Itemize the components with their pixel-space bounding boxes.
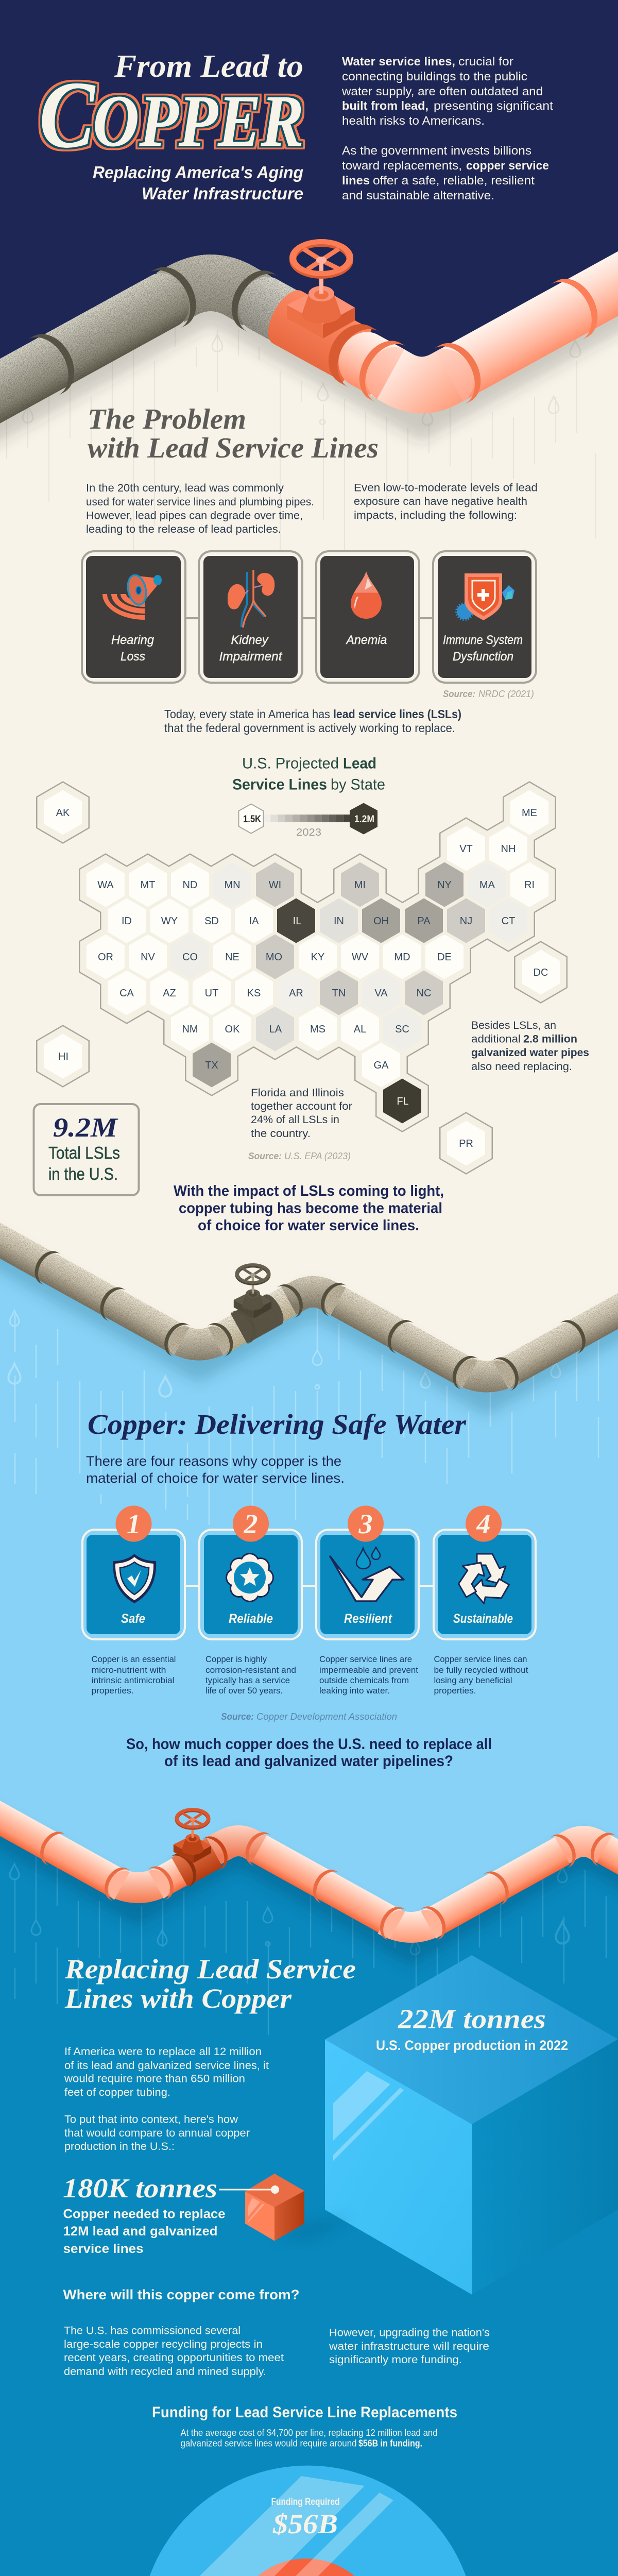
text: funding need: significantly more funding. [329,2353,462,2366]
value: funding required [271,2497,340,2539]
text: replacement context: of its lead and galvanized service lines, it [64,2059,269,2072]
text: galvanized pipes note: Besides LSLs, an [471,1019,556,1031]
state: WV: WV [352,952,369,963]
title [39,49,304,203]
text: replacement context: To put that into context, here's how [64,2113,238,2126]
value label: U.S. Copper production in 2022 [376,2038,568,2053]
state: MA: MA [479,879,495,891]
text: every state statement: lead service lines (LSLs) [333,707,461,721]
text: Florida and Illinois note [251,1087,352,1140]
label: Impairment [219,650,283,664]
callout: total LSLs: Total LSLs [48,1143,120,1162]
state: MD [383,935,421,979]
state: PA: PA [417,916,431,927]
state: MN [213,862,251,907]
state: OK [213,1007,251,1051]
text: benefit descriptions: impermeable and prevent [319,1665,418,1675]
state: AR [277,971,315,1015]
heading: hex map title [232,755,385,793]
card: sustainable [434,1505,536,1639]
card: reliable [199,1505,302,1639]
state: MT [129,862,167,907]
state: AK [44,790,82,835]
number badge: 1 [127,1509,141,1539]
text: copper transition statement: of choice for water service lines. [198,1217,419,1234]
text: every state statement: that the federal government is actively working to replace. [164,721,455,735]
text: benefit descriptions: life of over 50 years. [205,1686,283,1696]
intro text: copper service [466,159,549,172]
intro text: water supply, are often outdated and [341,84,543,98]
state: LA [256,1007,294,1051]
legend: lead service line scale: 1.2M [354,814,374,825]
text: benefit descriptions: outside chemicals from [319,1675,409,1685]
state: NH [489,826,527,871]
source: Copper Development Association: Source: [221,1711,254,1722]
state: KS [235,971,273,1015]
text: how much copper question: of its lead and galvanized water pipelines? [164,1753,453,1770]
text: four reasons intro [86,1453,345,1486]
text: replacement context: production in the U.S.: [64,2140,175,2153]
text: Florida and Illinois note: together account for [251,1100,352,1112]
intro text: presenting significant [434,99,554,112]
card: hearing loss [82,551,185,683]
state: TN: TN [332,988,346,999]
state: MS: MS [310,1024,325,1035]
state: NV: NV [141,952,156,963]
legend: lead service line scale: 1.5K [243,814,261,825]
text: replacement context: would require more than 650 million [64,2072,245,2084]
text: lead history [86,482,314,535]
label [443,633,523,664]
panel: copper benefit cards [82,1505,536,1639]
state: MN: MN [224,879,241,891]
text: copper transition statement: With the impact of LSLs coming to light, [174,1183,444,1199]
state: OR: OR [98,952,113,963]
state: UT [193,971,231,1015]
legend: lead service line scale: 2023 [296,827,321,838]
state: CA: CA [119,988,134,999]
text: funding subhead [180,2427,438,2448]
state: NM: NM [182,1024,198,1035]
text: benefit descriptions: Copper service lines can [434,1654,527,1664]
state: VA [362,971,400,1015]
text: benefit descriptions: intrinsic antimicrobial [92,1675,174,1685]
state: IA: IA [249,916,259,927]
callout: total LSLs [34,1104,139,1195]
state: NY: NY [437,879,452,891]
text: galvanized pipes note: 2.8 million [523,1032,577,1045]
state: GA: GA [374,1060,389,1071]
label: Kidney [231,633,269,647]
label: Hearing [111,633,154,647]
state: IN: IN [334,916,344,927]
source: NRDC: NRDC (2021) [478,689,534,699]
state: IL [277,899,315,943]
state: RI: RI [524,879,535,891]
state: IN [320,899,358,943]
text: benefit descriptions: typically has a service [205,1675,290,1685]
label: Resilient [344,1612,392,1626]
state: MT: MT [141,879,155,891]
state: WY [150,899,188,943]
value: funding required: Funding Required [271,2497,340,2507]
text: benefit descriptions: properties. [434,1686,476,1696]
heading: Replacing Lead Service Lines: Replacing Lead Service [64,1954,356,1985]
state: WA [87,862,125,907]
intro text: built from lead, [342,99,428,112]
callout: 180K tonnes: 12M lead and galvanized [63,2224,217,2239]
state: KS: KS [247,988,261,999]
state: AL: AL [354,1024,366,1035]
state: IA [235,899,273,943]
heading: hex map title: Lead [343,755,376,772]
state: OH [362,899,400,943]
state: AR: AR [289,988,303,999]
intro text: toward replacements, [342,159,462,172]
state: VT: VT [459,843,473,855]
callout: total LSLs: 9.2M [53,1113,118,1143]
state: NE [213,935,251,979]
state: TN [320,971,358,1015]
pipe: lead and copper header pipe [0,223,618,446]
state: UT: UT [205,988,218,999]
state: MO [256,935,294,979]
state: SC [383,1007,421,1051]
icon: kidneys [228,570,274,628]
value label [376,2004,568,2053]
chart: large cube for U.S. copper production [325,1955,618,2295]
icon: shield with check [113,1554,156,1603]
state: DE [425,935,464,979]
heading: Where will this copper come from: Where will this copper come from? [63,2287,300,2302]
title: COPPER [39,62,304,168]
number badge: 4 [476,1509,490,1539]
intro text: and sustainable alternative. [342,189,494,202]
icon: rosette with star [226,1553,274,1602]
title: COPPER: C [39,62,96,168]
heading: hex map title: by State [331,776,385,793]
intro text: As the government invests billions [342,144,531,157]
text: benefit descriptions: be fully recycled without [434,1665,528,1675]
intro text: health risks to Americans. [342,114,485,127]
state: TX: TX [205,1060,218,1071]
text: benefit descriptions: losing any beneficial [434,1675,512,1685]
callout: total LSLs: in the U.S. [48,1164,118,1183]
source: EPA: Source: [248,1151,282,1161]
state: NJ [447,899,485,943]
callout: 180K tonnes: Copper needed to replace [63,2207,226,2222]
text: benefit descriptions [92,1654,528,1696]
card: kidney impairment [199,551,302,683]
text: recycling projects: large-scale copper recycling projects in [64,2338,263,2350]
text: replacement context: that would compare to annual copper [64,2127,250,2139]
text: benefit descriptions: properties. [92,1686,134,1696]
valve: lead pipeline valve [234,1263,271,1318]
icon: blood drop [351,571,382,619]
text: lead history: However, lead pipes can degrade over time, [86,509,303,521]
state: HI: HI [58,1051,68,1062]
state: RI [510,862,548,907]
text: replacement context: If America were to replace all 12 million [64,2045,262,2058]
source: NRDC [443,689,534,699]
state: ID: ID [122,916,132,927]
state: SD: SD [204,916,219,927]
text: funding subhead: At the average cost of $4,700 per line, replacing 12 million lead and [180,2427,438,2438]
heading: The Problem: with Lead Service Lines [88,432,379,464]
valve: copper pipeline valve [174,1808,211,1863]
text: how much copper question [126,1736,492,1770]
title: COPPER: OPPER [93,80,304,162]
icon: check arrow with drops [330,1547,404,1601]
number badge [233,1505,269,1541]
heading: funding chart: Funding for Lead Service Line Replacements [152,2404,457,2421]
state: WI: WI [269,879,281,891]
text: recycling projects: recent years, creating opportunities to meet [64,2351,284,2364]
heading: Replacing Lead Service Lines: Lines with Copper [64,1983,292,2014]
text: benefit descriptions: corrosion-resistant and [205,1665,296,1675]
state: PA [405,899,443,943]
state: IL: IL [293,916,301,927]
state: AZ [150,971,188,1015]
state: MS [299,1007,337,1051]
card: safe [82,1505,185,1639]
state: WV [341,935,379,979]
subtitle: Water Infrastructure [142,184,303,203]
intro text: connecting buildings to the public [342,70,527,83]
text: replacement context [64,2045,269,2153]
text: every state statement [164,707,461,735]
text: recycling projects: The U.S. has commissioned several [64,2325,241,2337]
label: Reliable [229,1612,273,1626]
number badge [466,1505,502,1541]
source: Copper Development Association: Copper Development Association [256,1711,397,1722]
pipe shadow: lead [0,1225,618,1397]
state: MO: MO [266,952,282,963]
state: NY [425,862,464,907]
text: benefit descriptions: micro-nutrient with [92,1665,166,1675]
card: resilient [316,1505,419,1639]
state: AL [341,1007,379,1051]
source: EPA: U.S. EPA (2023) [284,1151,351,1161]
state: WI [256,862,294,907]
background: light blue section [0,1241,618,1958]
heading: The Problem [88,403,379,464]
state: KY [299,935,337,979]
label [111,633,154,664]
pipe: copper pipeline [0,1776,618,1941]
heading: hex map title: Service Lines [232,776,327,793]
text: galvanized pipes note: also need replacing. [471,1060,572,1073]
callout: 180K tonnes: service lines [63,2242,143,2256]
state: CT [489,899,527,943]
text: copper transition statement [174,1183,444,1234]
text: health impacts intro: Even low-to-moderate levels of lead [354,481,538,494]
text: galvanized pipes note: additional [471,1032,521,1045]
background: cream section [0,275,618,1391]
intro text [341,55,554,202]
source: NRDC: Source: [443,689,475,699]
text: funding subhead: $56B in funding. [358,2438,422,2448]
panel: health impact cards [82,551,536,683]
state: CO [171,935,209,979]
chart: hexagon tile map of states [44,790,560,1165]
intro text: offer a safe, reliable, resilient [373,174,535,187]
text: copper transition statement: copper tubing has become the material [179,1200,442,1217]
state: DC: DC [534,967,548,978]
state: DC [522,950,560,994]
card: immune system dysfunction [433,551,536,683]
callout: 180K tonnes: 180K tonnes [63,2174,217,2204]
text: lead history: used for water service lines and plumbing pipes. [86,496,314,508]
text: recycling projects: demand with recycled and mined supply. [64,2365,266,2378]
intro text: crucial for [458,55,513,68]
text: benefit descriptions: Copper is highly [205,1654,267,1664]
intro text: Water service lines, [342,55,455,68]
copper pipe [260,223,618,404]
state: CO: CO [182,952,198,963]
state: NV [129,935,167,979]
heading: The Problem: The Problem [88,403,246,435]
state: VT [447,826,485,871]
text: four reasons intro: There are four reasons why copper is the [86,1453,341,1469]
title: From Lead to [114,49,303,84]
text: replacement context: feet of copper tubing. [64,2086,170,2098]
pipe: lead pipeline [0,1187,618,1391]
background: deep blue section [0,1818,618,2576]
state: NJ: NJ [460,916,472,927]
number badge [115,1505,151,1541]
icon: shield and viruses [457,573,514,620]
text: health impacts intro: impacts, including the following: [354,509,517,521]
state: VA: VA [374,988,388,999]
label: Safe [121,1612,145,1626]
state: ME: ME [522,807,537,819]
label: Dysfunction [453,650,513,664]
text: galvanized pipes note [471,1019,589,1073]
text: health impacts intro [354,481,538,521]
text: four reasons intro: material of choice for water service lines. [86,1470,345,1486]
state: NH: NH [501,843,516,855]
number badge: 3 [358,1509,373,1539]
state: DE: DE [437,952,452,963]
state: PR [447,1121,485,1165]
pipe shadow: copper [0,1803,618,1948]
state: NC [405,971,443,1015]
text: lead history: leading to the release of lead particles. [86,523,281,535]
label: Immune System [443,633,523,647]
text: Florida and Illinois note: Florida and Illinois [251,1087,344,1099]
card: anemia [316,551,419,683]
source: EPA [248,1151,351,1161]
state: CA [108,971,146,1015]
lead pipe [0,258,319,446]
state: FL [383,1079,421,1123]
state: SC: SC [395,1024,409,1035]
state: NM [171,1007,209,1051]
state: AK: AK [56,807,70,819]
label [219,633,283,664]
subtitle [93,163,303,203]
state: WY: WY [161,916,178,927]
state: MA [468,862,506,907]
heading: Replacing Lead Service Lines [64,1954,356,2014]
intro text: lines [342,174,370,187]
text: lead history: In the 20th century, lead was commonly [86,482,284,494]
icon: megaphone [102,573,162,620]
callout line [219,2185,279,2194]
number badge [348,1505,384,1541]
state: PR: PR [459,1138,473,1149]
text: funding subhead: galvanized service lines would require around [180,2438,356,2448]
state: NC: NC [417,988,431,999]
state: ND [171,862,209,907]
state: OH: OH [373,916,389,927]
heading: hex map title: U.S. Projected [242,755,339,772]
callout: 180K tonnes [63,2174,226,2256]
state: TX [193,1043,231,1087]
state: WA: WA [97,879,114,891]
text: every state statement: Today, every state in America has [164,707,330,721]
state: HI [44,1033,82,1079]
state: CT: CT [502,916,515,927]
text: benefit descriptions: Copper is an essential [92,1654,176,1664]
subtitle: Replacing America's Aging [93,163,303,182]
text: funding need: However, upgrading the nation's [329,2327,490,2339]
text: benefit descriptions: Copper service lines are [319,1654,412,1664]
heading: Copper Delivering Safe Water: Copper: Delivering Safe Water [88,1409,467,1440]
state: FL: FL [397,1096,409,1107]
number badge: 2 [243,1509,258,1539]
text: how much copper question: So, how much copper does the U.S. need to replace all [126,1736,492,1753]
state: GA [362,1043,400,1087]
text: health impacts intro: exposure can have negative health [354,495,527,507]
label: Anemia [345,633,387,647]
legend: lead service line scale [239,803,377,838]
state: OK: OK [225,1024,240,1035]
value: funding required: $56B [272,2509,338,2539]
text: Florida and Illinois note: the country. [251,1127,311,1140]
text: funding need [329,2327,490,2366]
label: Loss [121,650,145,664]
state: AZ: AZ [163,988,176,999]
state: KY: KY [311,952,324,963]
state: LA: LA [269,1024,282,1035]
text: benefit descriptions: leaking into water. [319,1686,390,1696]
chart: semi-circle funding comparison [140,2466,476,2576]
state: ME [510,790,548,835]
valve: copper header valve [287,239,355,338]
icon: recycling arrows [452,1554,509,1609]
state: MD: MD [394,952,410,963]
chart: small cube for copper needed [219,2174,355,2241]
state: MI: MI [354,879,366,891]
state: SD [193,899,231,943]
value label: 22M tonnes [398,2004,546,2034]
state: MI [341,862,379,907]
pipe shadow: top [0,273,618,437]
text: galvanized pipes note: galvanized water pipes [471,1046,589,1059]
state: NE: NE [225,952,239,963]
state: OR [87,935,125,979]
state: ID [108,899,146,943]
state: ND: ND [183,879,197,891]
label: Sustainable [453,1612,513,1626]
text: funding need: water infrastructure will require [329,2340,489,2352]
text: recycling projects [64,2325,284,2378]
text: Florida and Illinois note: 24% of all LSLs in [251,1113,339,1126]
